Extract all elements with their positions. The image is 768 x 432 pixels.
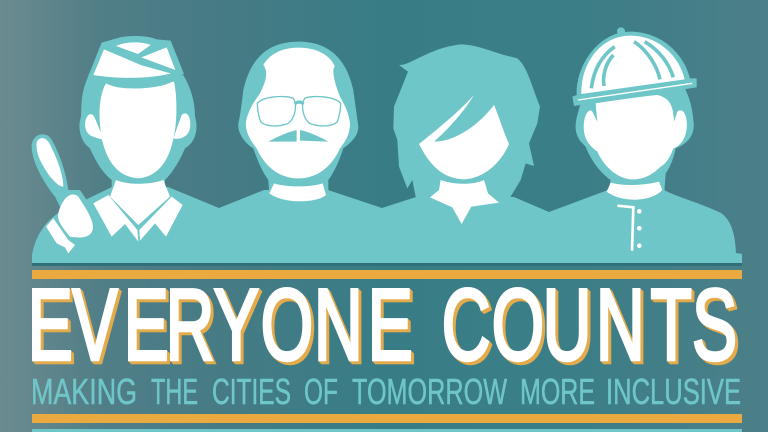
neck [607,182,662,200]
face [246,48,350,178]
bottom teal strip [32,429,742,432]
neck [430,180,499,224]
paddle [32,134,93,253]
head outline [238,42,358,197]
cap [87,36,184,82]
top orange bar [32,270,742,279]
person: woman with fringe [393,44,540,224]
subtitle: OF [304,371,338,412]
head outline [576,87,694,197]
person: worker with hard hat [572,27,697,251]
subtitle [31,371,741,412]
shoulders band [32,187,742,263]
subtitle: THE [151,371,198,412]
hard hat [572,27,697,106]
hair [393,44,540,207]
jacket placket [617,206,642,251]
subtitle: MORE [520,371,595,412]
collar [93,180,183,242]
title: EVERYONE [28,269,413,382]
subtitle: TOMORROW [352,371,507,412]
face [419,95,509,179]
face and ears [584,95,687,179]
band under illustration [32,263,742,266]
ears [85,113,190,140]
title [28,269,737,382]
bottom orange bar [32,414,742,423]
face [100,82,176,178]
neck [269,183,326,201]
person: bald man with glasses [238,42,358,201]
people illustration [32,27,742,263]
glasses [257,97,341,126]
title: COUNTS [442,269,737,382]
subtitle: CITIES [212,371,291,412]
moustache [268,130,328,142]
head outline [79,75,197,190]
person: server with cap and paddle [32,36,197,253]
subtitle: MAKING [31,371,137,412]
